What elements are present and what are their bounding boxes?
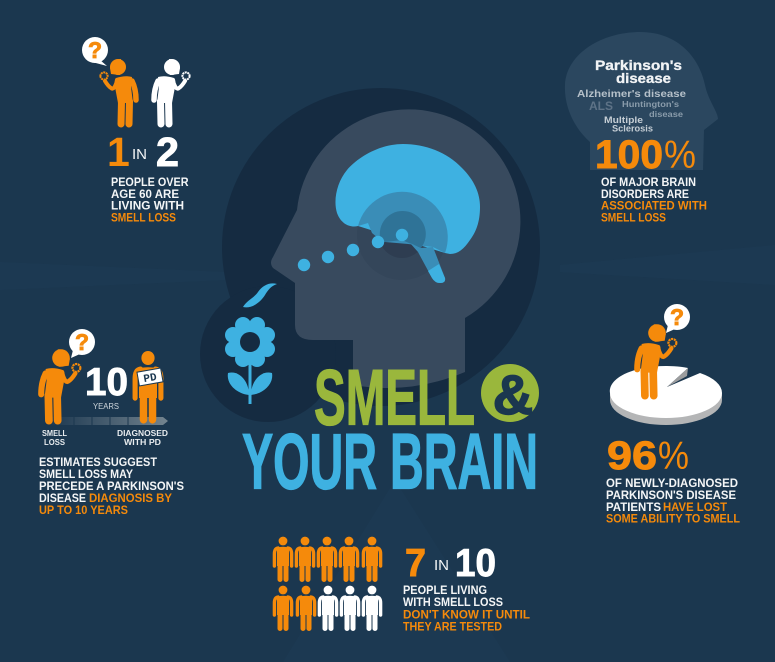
- icon: head with disease word cloud: Alzheimer's disease: [577, 89, 686, 100]
- brain: [335, 144, 480, 283]
- text block: THEY ARE TESTED: [403, 622, 502, 634]
- background rays: [0, 245, 775, 662]
- dark halo behind head and flower: [200, 88, 540, 422]
- text block: OF MAJOR BRAIN: [601, 177, 696, 189]
- statistic: IN: [434, 557, 449, 574]
- icon: flower: [225, 283, 277, 404]
- text block: DIAGNOSIS BY: [89, 493, 172, 505]
- text block: PATIENTS: [606, 502, 661, 514]
- text block: LIVING WITH: [111, 200, 184, 212]
- text block: DISEASE: [39, 493, 86, 505]
- arrow: timeline: [47, 417, 168, 425]
- text block: [403, 585, 530, 634]
- text block: [111, 177, 189, 224]
- icon: diagnosed person with PD sign: [135, 351, 163, 420]
- head silhouette: [271, 109, 520, 388]
- panel: 7 in 10: [274, 537, 530, 634]
- text block: [39, 457, 184, 517]
- scent dots: [298, 229, 408, 271]
- statistic: 96: [607, 434, 657, 478]
- statistic: [607, 434, 689, 478]
- icon: head with disease word cloud: ALS: [589, 99, 613, 113]
- text block: [606, 478, 740, 526]
- icon: orange person with flower: [100, 59, 136, 124]
- text block: DON'T KNOW IT UNTIL: [403, 610, 530, 622]
- panel: 96%: [606, 304, 740, 526]
- title: [242, 352, 539, 506]
- icon: question bubble: [664, 304, 690, 333]
- pie chart: [610, 366, 722, 425]
- text block: ASSOCIATED WITH: [601, 200, 707, 212]
- head silhouette with brain: [271, 109, 520, 388]
- icon: head with disease word cloud: Sclerosis: [612, 124, 653, 134]
- icon: people grid: [274, 537, 381, 628]
- text block: PARKINSON'S DISEASE: [606, 490, 736, 502]
- timeline labels: DIAGNOSED: [117, 429, 168, 438]
- timeline labels: SMELL: [42, 429, 67, 438]
- icon: question bubble: ?: [88, 37, 102, 63]
- statistic: 7: [405, 542, 426, 585]
- text block: WITH SMELL LOSS: [403, 597, 503, 609]
- timeline labels: [42, 429, 168, 447]
- text block: UP TO 10 YEARS: [39, 505, 128, 517]
- title: &: [493, 363, 533, 426]
- text block: HAVE LOST: [663, 502, 727, 514]
- text block: PEOPLE LIVING: [403, 585, 487, 597]
- statistic: 1: [107, 129, 130, 175]
- icon: head with disease word cloud: disease: [649, 110, 684, 119]
- statistic: 10: [455, 542, 496, 585]
- icon: question bubble: [69, 329, 95, 358]
- icon: diagnosed person with PD sign: PD: [143, 372, 158, 386]
- icon: head with disease word cloud: disease: [616, 71, 672, 86]
- statistic: [107, 129, 179, 175]
- icon: head with disease word cloud: Huntington's: [622, 100, 680, 109]
- statistic: [405, 542, 496, 585]
- statistic: 100: [595, 133, 663, 177]
- text block: SOME ABILITY TO SMELL: [606, 514, 740, 526]
- panel: 10 years timeline: [39, 329, 184, 517]
- timeline labels: LOSS: [44, 438, 66, 447]
- statistic: YEARS: [93, 402, 119, 411]
- icon: head with disease word cloud: Multiple: [604, 115, 643, 125]
- text block: PEOPLE OVER: [111, 177, 189, 189]
- text block: OF NEWLY-DIAGNOSED: [606, 478, 738, 490]
- panel: 1 in 2: [82, 37, 190, 224]
- statistic: %: [658, 435, 689, 478]
- statistic: IN: [132, 146, 147, 163]
- text block: SMELL LOSS MAY: [39, 469, 133, 481]
- title: SMELL: [314, 352, 475, 442]
- icon: head with disease word cloud: [565, 32, 718, 170]
- statistic: 2: [156, 129, 179, 175]
- text block: SMELL LOSS: [111, 212, 176, 224]
- text block: SMELL LOSS: [601, 212, 666, 224]
- text block: AGE 60 ARE: [111, 189, 179, 201]
- title: YOUR BRAIN: [242, 416, 538, 506]
- panel: 100% major brain disorders: [565, 32, 718, 224]
- text block: DISORDERS ARE: [601, 189, 689, 201]
- icon: white person with flower: [154, 59, 190, 124]
- statistic: %: [664, 134, 696, 177]
- icon: question bubble: [82, 37, 108, 66]
- text block: ESTIMATES SUGGEST: [39, 457, 157, 469]
- icon: person smelling flower: [637, 324, 676, 396]
- text block: [601, 177, 707, 224]
- statistic: [595, 133, 696, 177]
- timeline labels: WITH PD: [124, 438, 161, 447]
- text block: PRECEDE A PARKINSON'S: [39, 481, 184, 493]
- statistic: 10: [85, 361, 128, 404]
- icon: head with disease word cloud: Parkinson's: [595, 58, 682, 73]
- icon: person smelling flower: [41, 349, 80, 421]
